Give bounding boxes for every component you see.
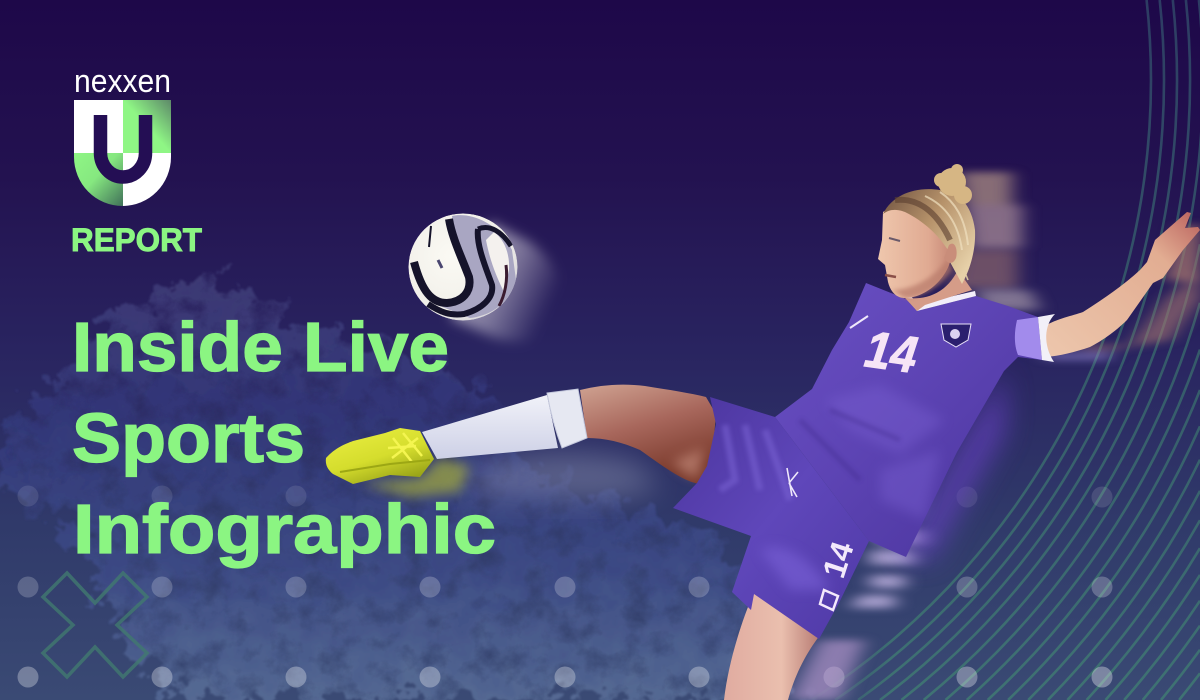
title (72, 308, 496, 568)
jersey (775, 283, 1055, 557)
head (878, 164, 975, 298)
raised thigh (580, 385, 716, 484)
hair bun (934, 164, 972, 204)
arm (1043, 212, 1200, 357)
logo shield (74, 100, 171, 207)
title: Sports (72, 399, 305, 477)
shorts number: 14 (815, 537, 861, 582)
title: Inside Live (72, 308, 449, 386)
shorts badge (820, 590, 838, 610)
jersey collar (905, 291, 976, 311)
logo: nexxen U (74, 63, 171, 207)
jersey sleeve cuff (1015, 317, 1042, 360)
shorts (673, 397, 869, 639)
neck (905, 270, 972, 311)
sock (422, 395, 558, 459)
dot grid (18, 486, 1112, 688)
footballer (326, 164, 1200, 700)
hamstring highlight (672, 448, 704, 478)
jersey number: 14 (861, 320, 921, 385)
lower thigh (724, 592, 820, 700)
ball (408, 214, 518, 320)
crest centre (950, 329, 960, 339)
icon: outlined X (43, 573, 147, 677)
ball motion trail (450, 222, 562, 342)
sock band (547, 389, 587, 448)
jersey crest (941, 324, 971, 347)
motion blur trails (790, 172, 1200, 700)
hair wisp (958, 255, 968, 280)
boot glow (360, 458, 470, 497)
concentric arcs (812, 0, 1200, 700)
report label: REPORT (71, 222, 202, 258)
jersey glow (900, 371, 1005, 560)
dust cloud (0, 252, 800, 670)
logo wordmark: nexxen (74, 63, 171, 99)
title: Infographic (73, 490, 496, 568)
boot (326, 428, 434, 484)
ball with motion blur (408, 214, 562, 342)
